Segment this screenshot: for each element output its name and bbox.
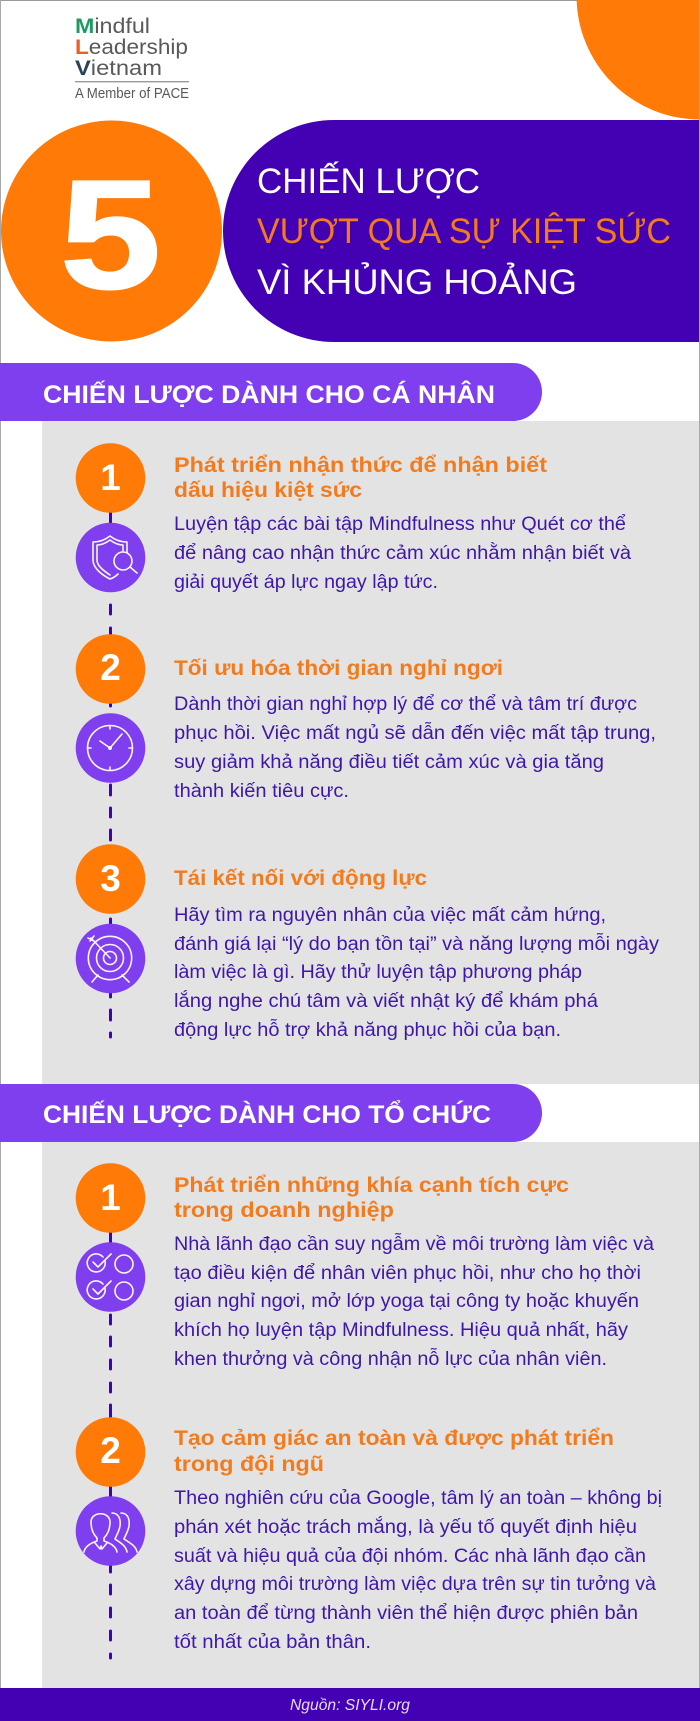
- panel: organization strategies: [42, 1142, 700, 1688]
- step text: phán xét hoặc trách mắng, là yếu tố quyết định hiệu: [174, 1516, 637, 1538]
- step text: giải quyết áp lực ngay lập tức.: [174, 572, 438, 593]
- title banner: CHIẾN LƯỢC: [257, 161, 480, 201]
- icon: target: [76, 924, 145, 993]
- number 1: 1: [100, 1177, 121, 1218]
- step text: làm việc là gì. Hãy thử luyện tập phương pháp: [174, 962, 582, 983]
- step heading: Phát triển những khía cạnh tích cực: [174, 1173, 569, 1197]
- step text: gian nghỉ ngơi, mở lớp yoga tại công ty hoặc khuyến: [174, 1291, 639, 1312]
- icon: team of people: [76, 1496, 145, 1566]
- step heading: Phát triển nhận thức để nhận biết: [174, 453, 547, 477]
- step text: suy giảm khả năng điều tiết cảm xúc và gia tăng: [174, 752, 604, 773]
- step text: xây dựng môi trường làm việc dựa trên sự tin tưởng và: [174, 1574, 656, 1595]
- step text: khen thưởng và công nhận nỗ lực của nhân viên.: [174, 1348, 607, 1370]
- step text: Nhà lãnh đạo cần suy ngẫm về môi trường làm việc và: [174, 1233, 654, 1255]
- number 2: [76, 1417, 145, 1487]
- section heading: individual: [0, 363, 542, 421]
- number 2: [76, 634, 145, 704]
- step heading: trong đội ngũ: [174, 1452, 324, 1476]
- logo: Mindful Leadership Vietnam: Mindful: [75, 14, 150, 38]
- logo: Mindful Leadership Vietnam: A Member of PACE: [75, 86, 189, 102]
- dashed timeline: [109, 1230, 112, 1658]
- big number 5 badge: [1, 120, 222, 342]
- footer: source: Nguồn: SIYLI.org: [290, 1697, 410, 1714]
- step heading: [174, 1426, 614, 1476]
- number 2: 2: [100, 1430, 121, 1471]
- step text: Theo nghiên cứu của Google, tâm lý an toàn – không bị: [174, 1488, 662, 1509]
- number 1: [76, 1163, 145, 1233]
- step text: thành kiến tiêu cực.: [174, 781, 349, 802]
- icon: clock: [76, 713, 145, 783]
- panel: individual strategies: [42, 421, 700, 1084]
- step text: động lực hỗ trợ khả năng phục hồi của bạn.: [174, 1019, 561, 1041]
- title banner: VƯỢT QUA SỰ KIỆT SỨC: [257, 212, 671, 251]
- step text: [174, 694, 656, 802]
- decorative orange circle top right: [576, 0, 700, 120]
- number 3: [76, 844, 145, 914]
- step heading: [174, 453, 547, 502]
- icon: checklist: [76, 1242, 145, 1312]
- step text: Hãy tìm ra nguyên nhân của việc mất cảm hứng,: [174, 905, 606, 926]
- step text: để nâng cao nhận thức cảm xúc nhằm nhận biết và: [174, 542, 631, 564]
- logo: Mindful Leadership Vietnam: Vietnam: [75, 56, 162, 80]
- section heading: individual: CHIẾN LƯỢC DÀNH CHO CÁ NHÂN: [43, 379, 495, 409]
- step heading: dấu hiệu kiệt sức: [174, 478, 362, 502]
- step text: đánh giá lại “lý do bạn tồn tại” và năng lượng mỗi ngày: [174, 933, 660, 955]
- number 1: 1: [100, 457, 121, 498]
- title banner: VÌ KHỦNG HOẢNG: [257, 262, 577, 302]
- footer: source: [0, 1688, 700, 1721]
- step text: an toàn để từng thành viên thể hiện được phiên bản: [174, 1603, 638, 1624]
- section heading: organization: [0, 1084, 542, 1142]
- step heading: trong doanh nghiệp: [174, 1198, 394, 1222]
- title banner: [223, 120, 700, 342]
- step heading: [174, 1173, 569, 1222]
- step heading: Tối ưu hóa thời gian nghỉ ngơi: [174, 656, 503, 680]
- step text: suất và hiệu quả của đội nhóm. Các nhà lãnh đạo cần: [174, 1546, 646, 1567]
- section heading: organization: CHIẾN LƯỢC DÀNH CHO TỔ CHỨC: [43, 1099, 491, 1129]
- dashed timeline: [109, 510, 112, 1037]
- number 3: 3: [100, 858, 121, 899]
- step text: [174, 905, 660, 1041]
- big number 5 badge: 5: [60, 148, 161, 321]
- step text: [174, 514, 631, 593]
- step text: phục hồi. Việc mất ngủ sẽ dẫn đến việc mất tập trung,: [174, 722, 656, 744]
- icon: shield with magnifier: [76, 523, 145, 592]
- step text: khích họ luyện tập Mindfulness. Hiệu quả nhất, hãy: [174, 1320, 629, 1341]
- step heading: Tái kết nối với động lực: [174, 866, 427, 890]
- step text: Dành thời gian nghỉ hợp lý để cơ thể và tâm trí được: [174, 694, 637, 715]
- number 1: [76, 443, 145, 513]
- number 2: 2: [100, 647, 121, 688]
- step text: [174, 1488, 662, 1653]
- step text: Luyện tập các bài tập Mindfulness như Quét cơ thể: [174, 514, 626, 535]
- step text: tốt nhất của bản thân.: [174, 1632, 371, 1653]
- step heading: Tạo cảm giác an toàn và được phát triển: [174, 1426, 614, 1450]
- logo: Mindful Leadership Vietnam: [75, 14, 189, 102]
- logo: Mindful Leadership Vietnam: Leadership: [75, 35, 188, 59]
- step text: [174, 1233, 654, 1370]
- step text: lắng nghe chú tâm và viết nhật ký để khám phá: [174, 990, 598, 1012]
- step text: tạo điều kiện để nhân viên phục hồi, như cho họ thời: [174, 1263, 641, 1284]
